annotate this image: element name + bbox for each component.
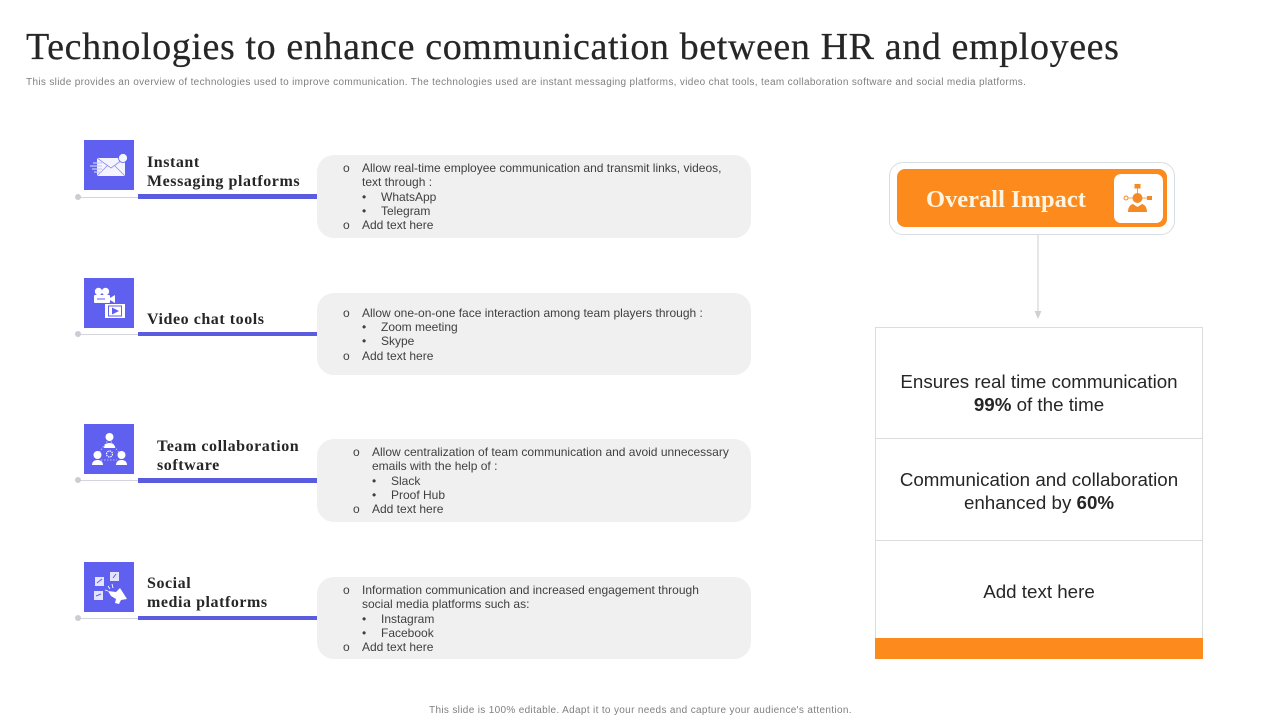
- text block: team collaboration: Allow centralization of team communication and avoid unnecessary: [372, 445, 729, 459]
- text block: team collaboration: o: [353, 445, 360, 459]
- panel: overall impact header: [889, 162, 1175, 235]
- text block: team collaboration: Add text here: [372, 502, 443, 516]
- text block: instant messaging: •: [362, 204, 366, 218]
- text block: instant messaging: Add text here: [362, 218, 433, 232]
- heading: social media: [147, 575, 268, 611]
- text block: social media: social media platforms such as:: [362, 597, 529, 611]
- footer note: This slide is 100% editable. Adapt it to your needs and capture your audience's attention.: [429, 705, 852, 716]
- title: Technologies to enhance communication between HR and employees: [26, 26, 1120, 68]
- text block: instant messaging: text through :: [362, 175, 432, 189]
- text block: video chat: Add text here: [362, 349, 433, 363]
- panel: results: [875, 327, 1203, 659]
- text block: social media: Instagram: [381, 612, 434, 626]
- heading: team collaboration: Team collaboration: [157, 438, 299, 455]
- text block: team collaboration: Slack: [391, 474, 420, 488]
- text block: social media: o: [343, 640, 350, 654]
- subtitle: This slide provides an overview of technologies used to improve communication. The technologies used are instant messaging platforms, video chat tools, team collaboration software and social media platforms.: [26, 77, 1026, 88]
- text block: instant messaging: Allow real-time employee communication and transmit links, videos,: [362, 161, 721, 175]
- text block: team collaboration: o: [353, 502, 360, 516]
- text block: social media: •: [362, 626, 366, 640]
- text block: team collaboration: Proof Hub: [391, 488, 445, 502]
- result: add text: [875, 540, 1203, 639]
- text block: video chat: •: [362, 334, 366, 348]
- icon: video camera: [84, 278, 134, 328]
- text block: social media: o: [343, 583, 350, 597]
- result: add text: Add text here: [983, 581, 1095, 602]
- text block: social media: [317, 577, 751, 659]
- text block: video chat: o: [343, 349, 350, 363]
- text block: social media: Information communication and increased engagement through: [362, 583, 699, 597]
- text block: video chat: Skype: [381, 334, 414, 348]
- text block: social media: •: [362, 612, 366, 626]
- result: collaboration enhanced: enhanced by 60%: [964, 492, 1114, 513]
- panel: social media row: [75, 562, 751, 659]
- icon: social media megaphone: [84, 562, 134, 612]
- heading: social media: Social: [147, 575, 191, 592]
- orange banner: [897, 169, 1167, 227]
- text block: team collaboration: emails with the help of :: [372, 459, 497, 473]
- text block: instant messaging: •: [362, 190, 366, 204]
- text block: team collaboration: •: [372, 474, 376, 488]
- heading: social media: media platforms: [147, 594, 268, 611]
- icon: envelope: [84, 140, 134, 190]
- result: collaboration enhanced: [875, 438, 1203, 541]
- text block: team collaboration: •: [372, 488, 376, 502]
- text block: social media: Facebook: [381, 626, 434, 640]
- text block: video chat: [317, 293, 751, 375]
- icon: team: [84, 424, 134, 474]
- heading: instant messaging: [147, 154, 300, 190]
- result: real time communication: 99% of the time: [974, 394, 1104, 415]
- text block: team collaboration: [317, 439, 751, 522]
- result: real time communication: Ensures real time communication: [900, 371, 1178, 392]
- arrow: down to results: [1034, 235, 1042, 319]
- text block: social media: Add text here: [362, 640, 433, 654]
- heading: team collaboration: [157, 438, 299, 474]
- text block: video chat: Zoom meeting: [381, 320, 458, 334]
- result: collaboration enhanced: Communication and collaboration: [900, 469, 1178, 490]
- heading: instant messaging: Messaging platforms: [147, 173, 300, 190]
- text block: instant messaging: Telegram: [381, 204, 430, 218]
- text block: instant messaging: o: [343, 218, 350, 232]
- heading: instant messaging: Instant: [147, 154, 200, 171]
- text block: instant messaging: WhatsApp: [381, 190, 436, 204]
- text block: video chat: •: [362, 320, 366, 334]
- panel: video chat row: [75, 278, 751, 375]
- orange footer bar: [875, 638, 1203, 659]
- heading: overall impact: Overall Impact: [926, 186, 1086, 213]
- text block: video chat: Allow one-on-one face interaction among team players through :: [362, 306, 703, 320]
- panel: instant messaging row: [75, 140, 751, 238]
- result: real time communication: [875, 328, 1203, 439]
- text block: instant messaging: o: [343, 161, 350, 175]
- text block: instant messaging: [317, 155, 751, 238]
- panel: team collaboration row: [75, 424, 751, 522]
- icon: person with network: [1114, 174, 1163, 223]
- heading: team collaboration: software: [157, 457, 220, 474]
- heading: video chat: Video chat tools: [147, 311, 265, 328]
- text block: video chat: o: [343, 306, 350, 320]
